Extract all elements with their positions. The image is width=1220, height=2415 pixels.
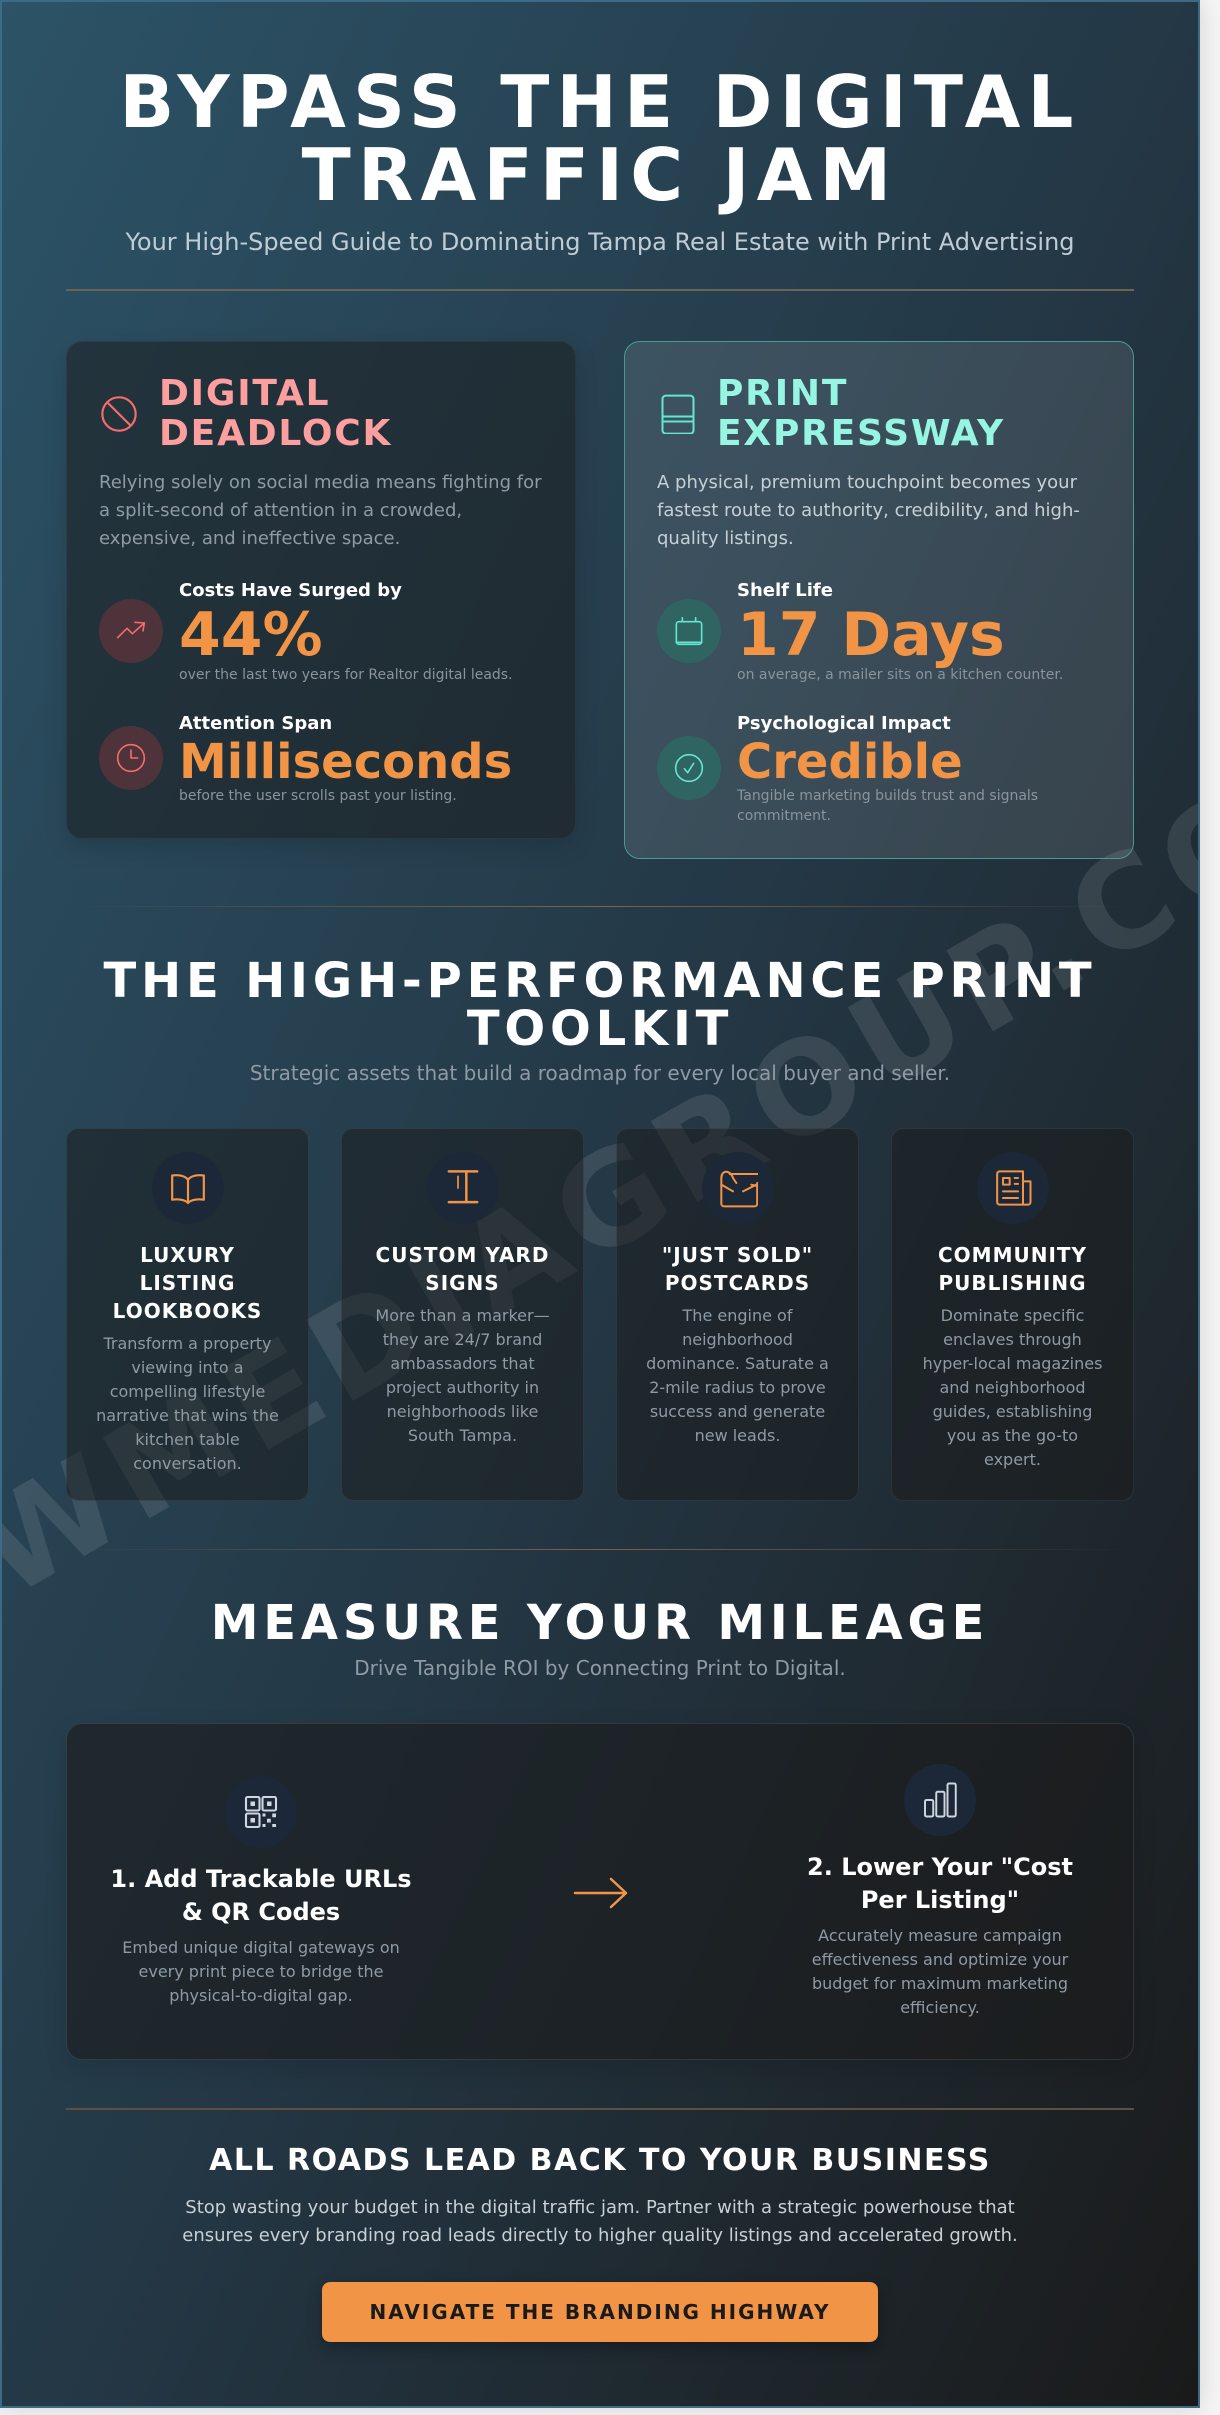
card: custom yard signs (341, 1128, 584, 1501)
stat: shelf life: Shelf Life (737, 580, 833, 601)
arrow (574, 1878, 628, 1908)
step 1: trackable urls: Embed unique digital gateways on every print piece to bridge the physical-to-digital gap. (122, 1938, 400, 2005)
section subtitle: toolkit: Strategic assets that build a roadmap for every local buyer and seller. (250, 1061, 950, 1085)
stat: costs surged: over the last two years for Realtor digital leads. (179, 667, 513, 683)
title: BYPASS THE DIGITAL (119, 60, 1081, 144)
section heading: toolkit: TOOLKIT (467, 1001, 733, 1057)
closing text: Stop wasting your budget in the digital traffic jam. Partner with a strategic powerhouse that (185, 2197, 1015, 2218)
closing text (182, 2197, 1018, 2246)
card: community publishing: Dominate specific enclaves through hyper-local magazines and neighborhood guides, establishing you as the go-to expert. (923, 1306, 1102, 1469)
icon: bar chart (904, 1764, 976, 1836)
stat: attention span: before the user scrolls past your listing. (179, 788, 457, 804)
title (119, 60, 1081, 216)
card: luxury listing lookbooks: LOOKBOOKS (113, 1299, 262, 1323)
step 1: trackable urls (110, 1776, 412, 2005)
card: just sold postcards (616, 1128, 859, 1501)
panel heading: digital deadlock: DIGITAL (159, 373, 330, 414)
card: community publishing: COMMUNITY (938, 1243, 1087, 1267)
panel heading: digital deadlock (101, 373, 392, 454)
stat: psychological impact: Credible (737, 734, 963, 790)
panel heading: print expressway: EXPRESSWAY (717, 412, 1005, 454)
icon: open book (152, 1152, 224, 1224)
step 2: cost per listing (807, 1764, 1073, 2017)
icon: qr code (225, 1776, 297, 1848)
section subtitle: mileage: Drive Tangible ROI by Connecting Print to Digital. (354, 1656, 846, 1680)
stat: attention span (99, 713, 512, 804)
panel: print expressway (624, 341, 1134, 859)
icon: printed piece (662, 394, 694, 434)
card: luxury listing lookbooks: Transform a property viewing into a compelling lifestyle narrative that wins the kitchen table conversation. (96, 1334, 279, 1473)
card: custom yard signs: CUSTOM YARD (376, 1243, 549, 1267)
panel heading: print expressway (662, 373, 1005, 454)
card: luxury listing lookbooks (66, 1128, 309, 1501)
subtitle: Your High-Speed Guide to Dominating Tampa Real Estate with Print Advertising (125, 228, 1075, 256)
card: just sold postcards: POSTCARDS (665, 1271, 810, 1295)
card: just sold postcards: The engine of neighborhood dominance. Saturate a 2-mile radius to prove success and generate new leads. (646, 1306, 829, 1445)
stat: shelf life: 17 Days (737, 600, 1005, 670)
card: custom yard signs: SIGNS (425, 1271, 500, 1295)
stat: psychological impact: Tangible marketing builds trust and signals commitment. (737, 788, 1038, 824)
stat: shelf life: on average, a mailer sits on a kitchen counter. (737, 667, 1063, 683)
stat: attention span: Milliseconds (179, 734, 512, 790)
card: community publishing: PUBLISHING (938, 1271, 1087, 1295)
call to action button (322, 2282, 878, 2342)
card: luxury listing lookbooks: LUXURY (140, 1243, 235, 1267)
icon: clock (99, 726, 163, 790)
step 1: trackable urls: 1. Add Trackable URLs & QR Codes (110, 1865, 412, 1926)
icon: check circle (657, 736, 721, 800)
section heading: toolkit: THE HIGH-PERFORMANCE PRINT (104, 953, 1096, 1009)
icon: newspaper (976, 1152, 1048, 1224)
card: luxury listing lookbooks: LISTING (140, 1271, 235, 1295)
stat: costs surged (99, 580, 513, 683)
card: community publishing (891, 1128, 1134, 1501)
step 2: cost per listing: Accurately measure campaign effectiveness and optimize your budget for maximum marketing efficiency. (812, 1926, 1068, 2017)
step 2: cost per listing: 2. Lower Your "Cost Per Listing" (807, 1853, 1073, 1914)
stat: costs surged: Costs Have Surged by (179, 580, 402, 601)
panel heading: digital deadlock: DEADLOCK (159, 412, 392, 454)
panel: digital deadlock (66, 341, 576, 839)
icon: calendar (657, 599, 721, 663)
panel description: Relying solely on social media means fighting for a split-second of attention in a crowded, expensive, and ineffective space. (99, 472, 541, 549)
call to action button: NAVIGATE THE BRANDING HIGHWAY (370, 2300, 830, 2324)
icon: prohibited (101, 396, 137, 432)
panel heading: print expressway: PRINT (717, 373, 848, 414)
panel description: A physical, premium touchpoint becomes your fastest route to authority, credibility, and high-quality listings. (657, 472, 1080, 549)
stat: attention span: Attention Span (179, 713, 332, 734)
panel: measurement steps (66, 1723, 1134, 2060)
closing text: ensures every branding road leads directly to higher quality listings and accelerated growth. (182, 2225, 1018, 2246)
stat: shelf life (657, 580, 1063, 683)
closing heading: ALL ROADS LEAD BACK TO YOUR BUSINESS (209, 2143, 991, 2178)
section heading: mileage: MEASURE YOUR MILEAGE (211, 1595, 989, 1651)
stat: costs surged: 44% (179, 600, 323, 670)
stat: psychological impact (657, 713, 1038, 824)
icon: yard sign (426, 1152, 498, 1224)
card: just sold postcards: "JUST SOLD" (662, 1243, 813, 1267)
icon: trending up (99, 599, 163, 663)
card: custom yard signs: More than a marker—they are 24/7 brand ambassadors that project authority in neighborhoods like South Tampa. (375, 1306, 550, 1445)
stat: psychological impact: Psychological Impact (737, 713, 951, 734)
title: TRAFFIC JAM (302, 132, 898, 216)
section heading: toolkit (104, 953, 1096, 1057)
icon: postcard envelope (702, 1152, 774, 1224)
